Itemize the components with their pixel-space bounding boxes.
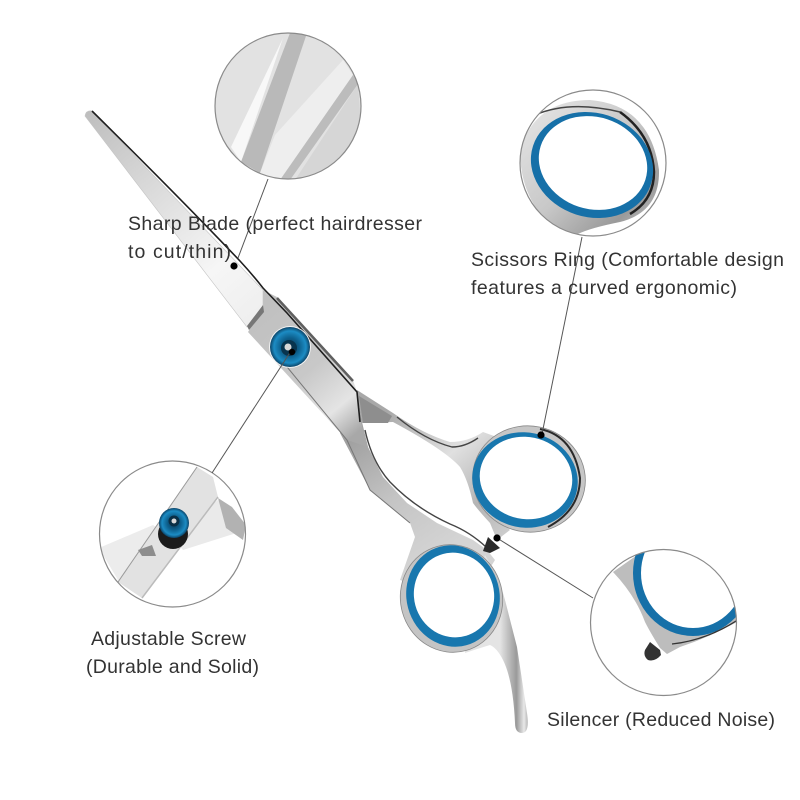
detail circle: silencer bbox=[590, 548, 738, 696]
label: silencer: Silencer (Reduced Noise) bbox=[547, 709, 775, 731]
label: sharp blade: Sharp Blade (perfect hairdresser bbox=[128, 213, 422, 235]
upper ring dark rim bbox=[540, 429, 580, 527]
blade dark edge bbox=[92, 111, 360, 422]
blade notch shadow bbox=[247, 305, 264, 330]
label: scissors ring: features a curved ergonomic) bbox=[471, 277, 737, 299]
lower ring blue bbox=[395, 535, 511, 657]
pivot screw bbox=[269, 326, 311, 368]
lower ring hole bbox=[404, 544, 504, 646]
detail circle: adjustable screw bbox=[99, 461, 246, 607]
leader line: scissors ring bbox=[537, 237, 582, 439]
lower ring steel bbox=[388, 533, 515, 664]
lower arm bbox=[340, 395, 495, 600]
scissors illustration bbox=[85, 111, 595, 733]
detail circle: scissors ring bbox=[517, 90, 667, 236]
label: sharp blade: to cut/thin) bbox=[128, 241, 231, 263]
upper arm bbox=[357, 390, 510, 540]
label: sharp blade bbox=[128, 213, 422, 263]
leader line: adjustable screw bbox=[212, 349, 295, 473]
leader line: silencer bbox=[493, 534, 593, 598]
label: scissors ring: Scissors Ring (Comfortable design bbox=[471, 249, 784, 271]
upper ring blue bbox=[463, 423, 587, 537]
second blade sliver bbox=[277, 298, 353, 381]
label: adjustable screw bbox=[86, 628, 259, 678]
label: adjustable screw: (Durable and Solid) bbox=[86, 656, 259, 678]
label: scissors ring bbox=[471, 249, 784, 299]
leader line: sharp blade bbox=[230, 179, 268, 270]
detail circle: sharp blade bbox=[214, 32, 362, 180]
label: adjustable screw: Adjustable Screw bbox=[91, 628, 247, 650]
blade bbox=[85, 111, 263, 327]
upper ring steel bbox=[463, 415, 595, 543]
infographic: scissors anatomy bbox=[84, 32, 783, 733]
arm dark groove bbox=[365, 417, 486, 547]
shank bbox=[248, 290, 368, 447]
upper ring hole bbox=[472, 428, 580, 528]
pivot wedge bbox=[359, 396, 392, 423]
finger rest bbox=[465, 555, 528, 733]
shank lower outline bbox=[283, 362, 410, 523]
silencer bbox=[483, 537, 500, 553]
